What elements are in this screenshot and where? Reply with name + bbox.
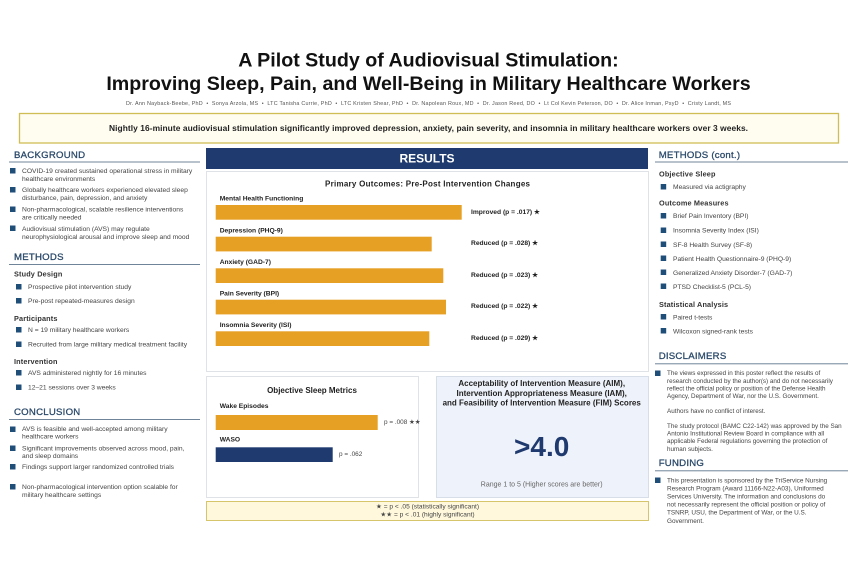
conclusion bullets: military healthcare settings: [22, 492, 102, 499]
range note: Range 1 to 5 (Higher scores are better): [481, 482, 603, 488]
heading: methods: METHODS: [14, 252, 64, 263]
background bullets: COVID-19 created sustained operational stress in military: [22, 168, 193, 175]
objective sleep: Objective Sleep: [659, 170, 716, 178]
bar: mental health functioning: Improved (p = .017) ★: [471, 208, 541, 216]
conclusion bullets: Non-pharmacological intervention option scalable for: [22, 484, 179, 491]
sleep chart title: Objective Sleep Metrics: [267, 386, 357, 395]
conclusion bullets: and sleep domains: [22, 453, 79, 460]
background bullets: neurophysiological arousal and improve sleep and mood: [22, 234, 190, 241]
panel: methods: [9, 252, 200, 392]
panel: background: [9, 150, 200, 241]
background bullets: Non-pharmacological, scalable resilience interventions: [22, 206, 184, 214]
conclusion bullets: healthcare workers: [22, 434, 79, 440]
title: A Pilot Study of Audiovisual Stimulation:: [238, 50, 619, 72]
conclusion bullets: Findings support larger randomized controlled trials: [22, 464, 175, 471]
acceptability heading: Acceptability of Intervention Measure (AIM),: [458, 379, 625, 388]
panel: objective sleep metrics: [206, 376, 421, 498]
bar: anxiety: Reduced (p = .023) ★: [471, 271, 539, 279]
outcome measures: Insomnia Severity Index (ISI): [673, 228, 759, 234]
funding text: Services University. The information and conclusions do: [667, 494, 826, 500]
chart title: Primary Outcomes: Pre-Post Intervention Changes: [325, 180, 531, 188]
participants: [14, 314, 188, 348]
statistical analysis: [659, 300, 754, 336]
bar: wake episodes: [216, 403, 421, 430]
outcome measures: Outcome Measures: [659, 198, 729, 208]
panel: primary outcomes chart: [206, 172, 648, 372]
panel: methods continued: [655, 150, 848, 336]
bar: insomnia severity: Reduced (p = .029) ★: [471, 334, 539, 342]
authors line: Dr. Ann Nayback-Beebe, PhD • Sonya Arzola, MS • LTC Tanisha Currie, PhD • LTC Kristen Shear, PhD • Dr. Napolean Roux, MD • Dr. Jason Reed, DO • Lt Col Kevin Peterson, DO • Dr. Alice Inman, PsyD • Cristy Landt, MS: [126, 101, 731, 107]
key finding banner: Nightly 16-minute audiovisual stimulation significantly improved depression, anxiety, pain severity, and insomnia in military healthcare workers over 3 weeks.: [109, 123, 748, 133]
bar: insomnia severity: [216, 322, 539, 346]
outcome measures: Generalized Anxiety Disorder-7 (GAD-7): [673, 270, 792, 277]
key finding banner: [20, 114, 838, 143]
study design: Pre-post repeated-measures design: [28, 298, 135, 305]
objective sleep: [659, 170, 747, 191]
disclaimers text: Agency, Department of War, nor the U.S. Government.: [667, 393, 819, 400]
significance legend: ★ = p < .05 (statistically significant): [376, 502, 479, 510]
intervention: AVS administered nightly for 16 minutes: [28, 370, 147, 377]
conclusion bullets: Significant improvements observed across mood, pain,: [22, 446, 185, 452]
funding text: Government.: [667, 518, 704, 525]
outcome measures: Brief Pain Inventory (BPI): [673, 213, 748, 220]
participants: N = 19 military healthcare workers: [28, 327, 130, 334]
objective sleep: Measured via actigraphy: [673, 184, 747, 191]
bar: waso: [216, 436, 363, 462]
bar: anxiety: [216, 259, 539, 283]
heading: methods cont: METHODS (cont.): [659, 150, 740, 161]
outcome measures: [659, 198, 792, 291]
funding text: Research Program (Award 11166-N22-A03), Uniformed: [667, 486, 824, 492]
bar: depression: Reduced (p = .028) ★: [471, 239, 539, 247]
statistical analysis: Statistical Analysis: [659, 300, 728, 309]
disclaimers text: [655, 370, 842, 453]
participants: Participants: [14, 314, 58, 323]
intervention: 12–21 sessions over 3 weeks: [28, 384, 116, 392]
study design: Prospective pilot intervention study: [28, 284, 132, 291]
title: Improving Sleep, Pain, and Well-Being in Military Healthcare Workers: [106, 73, 751, 95]
background bullets: healthcare environments: [22, 176, 96, 183]
panel: acceptability score: [436, 376, 648, 498]
outcome measures: SF-8 Health Survey (SF-8): [673, 242, 752, 249]
disclaimers text: Antonio Institutional Review Board in compliance with all: [667, 430, 824, 438]
bar: depression: Depression (PHQ-9): [220, 228, 283, 234]
big score: >4.0: [514, 431, 569, 462]
panel: disclaimers: [655, 351, 848, 453]
results header: RESULTS: [399, 151, 455, 165]
bar: pain severity: Reduced (p = .022) ★: [471, 302, 539, 310]
bar: wake episodes: p = .008 ★★: [384, 419, 421, 426]
statistical analysis: Wilcoxon signed-rank tests: [673, 328, 754, 336]
disclaimers text: applicable Federal regulations governing the protection of: [667, 438, 828, 445]
significance legend: [206, 502, 648, 520]
study design: [14, 270, 135, 305]
title: [106, 50, 751, 95]
funding text: TSNRP, USU, the Department of War, or the U.S.: [667, 510, 807, 516]
statistical analysis: Paired t-tests: [673, 314, 713, 322]
heading: disclaimers: DISCLAIMERS: [659, 351, 726, 362]
intervention: [14, 357, 147, 392]
disclaimers text: The views expressed in this poster reflect the results of: [667, 370, 821, 377]
funding text: [655, 478, 828, 525]
disclaimers text: The study protocol (BAMC C22-142) was approved by the San: [667, 423, 842, 430]
bar: waso: p = .062: [339, 451, 363, 458]
background bullets: Audiovisual stimulation (AVS) may regulate: [22, 226, 150, 233]
significance legend: ★★ = p < .01 (highly significant): [380, 510, 475, 518]
background bullets: disturbance, pain, depression, and anxiety: [22, 195, 148, 202]
bar: wake episodes: Wake Episodes: [220, 403, 269, 410]
study design: Study Design: [14, 270, 62, 278]
bar: mental health functioning: Mental Health Functioning: [220, 196, 303, 202]
bar: insomnia severity: Insomnia Severity (ISI): [220, 322, 291, 329]
heading: background: BACKGROUND: [14, 150, 85, 161]
acceptability heading: [443, 379, 641, 408]
background bullets: Globally healthcare workers experienced elevated sleep: [22, 187, 188, 194]
funding text: not necessarily represent the official position or policy of: [667, 502, 826, 508]
background bullets: [10, 168, 193, 241]
intervention: Intervention: [14, 357, 58, 366]
background bullets: are critically needed: [22, 214, 82, 222]
results header: [206, 148, 648, 169]
participants: Recruited from large military medical treatment facility: [28, 342, 188, 348]
heading: conclusion: CONCLUSION: [14, 407, 80, 418]
funding text: This presentation is sponsored by the TriService Nursing: [667, 478, 828, 484]
panel: funding: [655, 458, 848, 525]
panel: conclusion: [9, 407, 200, 499]
bar: anxiety: Anxiety (GAD-7): [220, 259, 271, 266]
bar: pain severity: [216, 290, 539, 314]
conclusion bullets: AVS is feasible and well-accepted among military: [22, 426, 168, 433]
heading: funding: FUNDING: [659, 458, 704, 469]
acceptability heading: Intervention Appropriateness Measure (IAM),: [456, 389, 627, 398]
disclaimers text: research conducted by the author(s) and do not necessarily: [667, 378, 834, 385]
bar: pain severity: Pain Severity (BPI): [220, 290, 279, 298]
outcome measures: PTSD Checklist-5 (PCL-5): [673, 284, 751, 291]
disclaimers text: human subjects.: [667, 446, 713, 453]
bar: mental health functioning: [216, 196, 541, 220]
bar: waso: WASO: [220, 436, 240, 444]
bar: depression: [216, 228, 539, 251]
acceptability heading: and Feasibility of Intervention Measure (FIM) Scores: [443, 398, 641, 408]
disclaimers text: Authors have no conflict of interest.: [667, 408, 766, 415]
outcome measures: Patient Health Questionnaire-9 (PHQ-9): [673, 256, 791, 263]
disclaimers text: reflect the official policy or position of the Defense Health: [667, 386, 826, 392]
conclusion bullets: [10, 426, 185, 499]
